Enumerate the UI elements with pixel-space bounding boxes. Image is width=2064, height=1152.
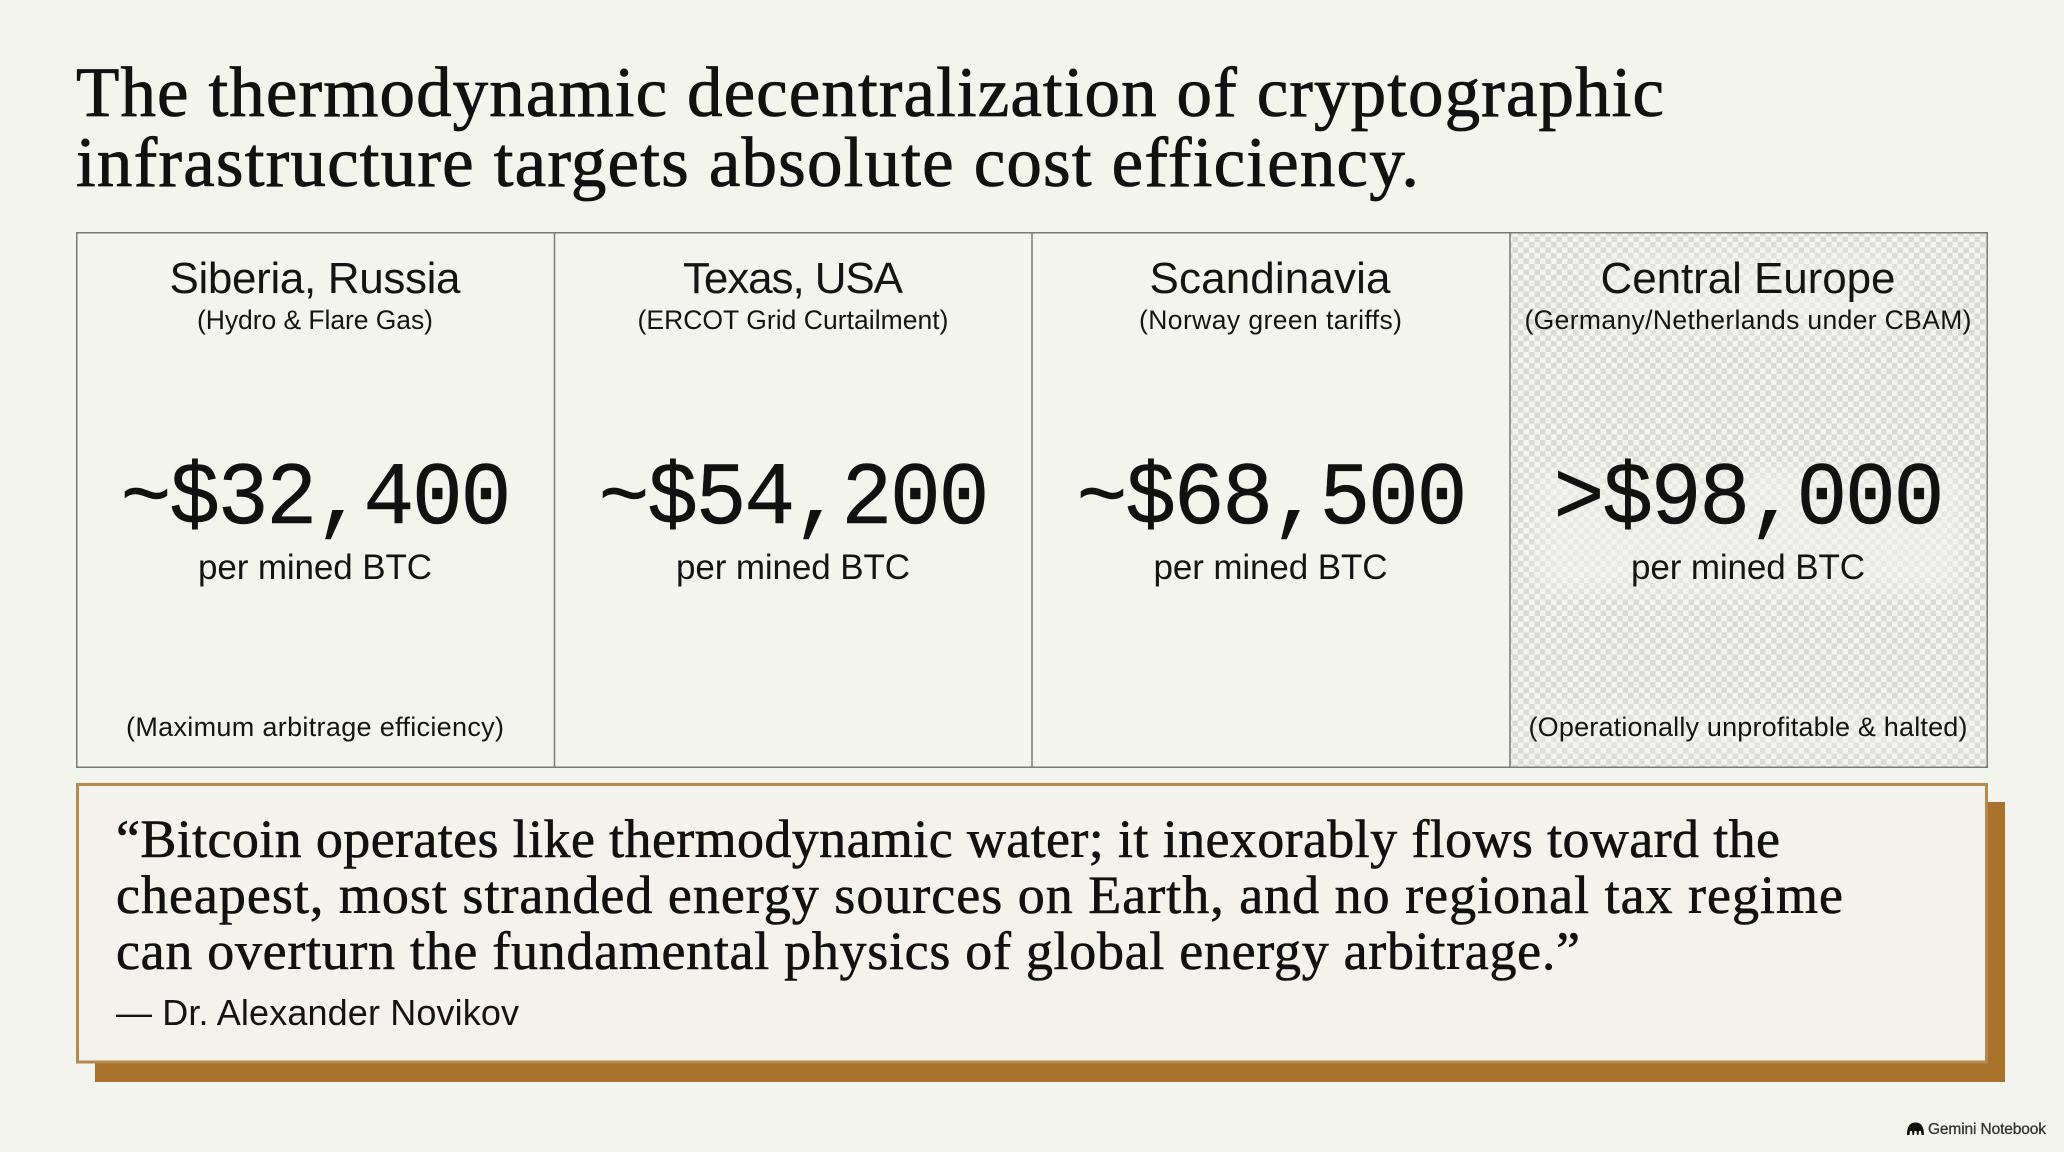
panel: Texas, USA: (ERCOT Grid Curtailment) (638, 305, 948, 335)
panel: Scandinavia: (Norway green tariffs) (1139, 305, 1402, 335)
title: infrastructure targets absolute cost efficiency. (76, 124, 1419, 202)
icon: Gemini Notebook logo (1907, 1122, 1924, 1135)
panel: Scandinavia: ~$68,500 (1076, 449, 1468, 551)
panel: Siberia, Russia (120, 254, 512, 742)
panel: Siberia, Russia: Siberia, Russia (170, 254, 461, 303)
panel: Central Europe hatched background (1510, 232, 1988, 768)
quote text (116, 809, 1843, 981)
quote text: can overturn the fundamental physics of global energy arbitrage.” (116, 921, 1580, 981)
panel: Scandinavia: per mined BTC (1154, 548, 1388, 587)
title (76, 54, 1664, 202)
panel: Central Europe: per mined BTC (1631, 548, 1865, 587)
panel: Central Europe (1524, 254, 1972, 742)
panel: Siberia, Russia: ~$32,400 (120, 449, 512, 551)
panel: Scandinavia (1076, 254, 1468, 587)
panel: Texas, USA: per mined BTC (676, 548, 910, 587)
panel: Central Europe: (Operationally unprofitable & halted) (1528, 712, 1968, 742)
title: The thermodynamic decentralization of cryptographic (76, 54, 1664, 132)
watermark text: Gemini Notebook (1928, 1121, 2046, 1138)
panel: Central Europe: (Germany/Netherlands under CBAM) (1524, 305, 1972, 335)
panel: Texas, USA: ~$54,200 (598, 449, 990, 551)
offset shadow (95, 802, 2005, 1082)
panel: Texas, USA (598, 254, 990, 587)
panel: Central Europe: >$98,000 (1554, 449, 1944, 551)
panel: quote callout (78, 784, 2005, 1082)
panel: Texas, USA: Texas, USA (683, 254, 904, 303)
panel: Central Europe: Central Europe (1600, 254, 1896, 303)
quote text: cheapest, most stranded energy sources on Earth, and no regional tax regime (116, 865, 1843, 925)
panel: Siberia, Russia: (Hydro & Flare Gas) (197, 305, 433, 335)
panel: Siberia, Russia: (Maximum arbitrage efficiency) (126, 712, 504, 742)
panel: cost comparison table (77, 232, 1988, 768)
panel: Scandinavia: Scandinavia (1150, 254, 1391, 303)
quote text: “Bitcoin operates like thermodynamic water; it inexorably flows toward the (116, 809, 1780, 869)
panel: Siberia, Russia: per mined BTC (198, 548, 432, 587)
quote attribution: — Dr. Alexander Novikov (116, 992, 519, 1033)
